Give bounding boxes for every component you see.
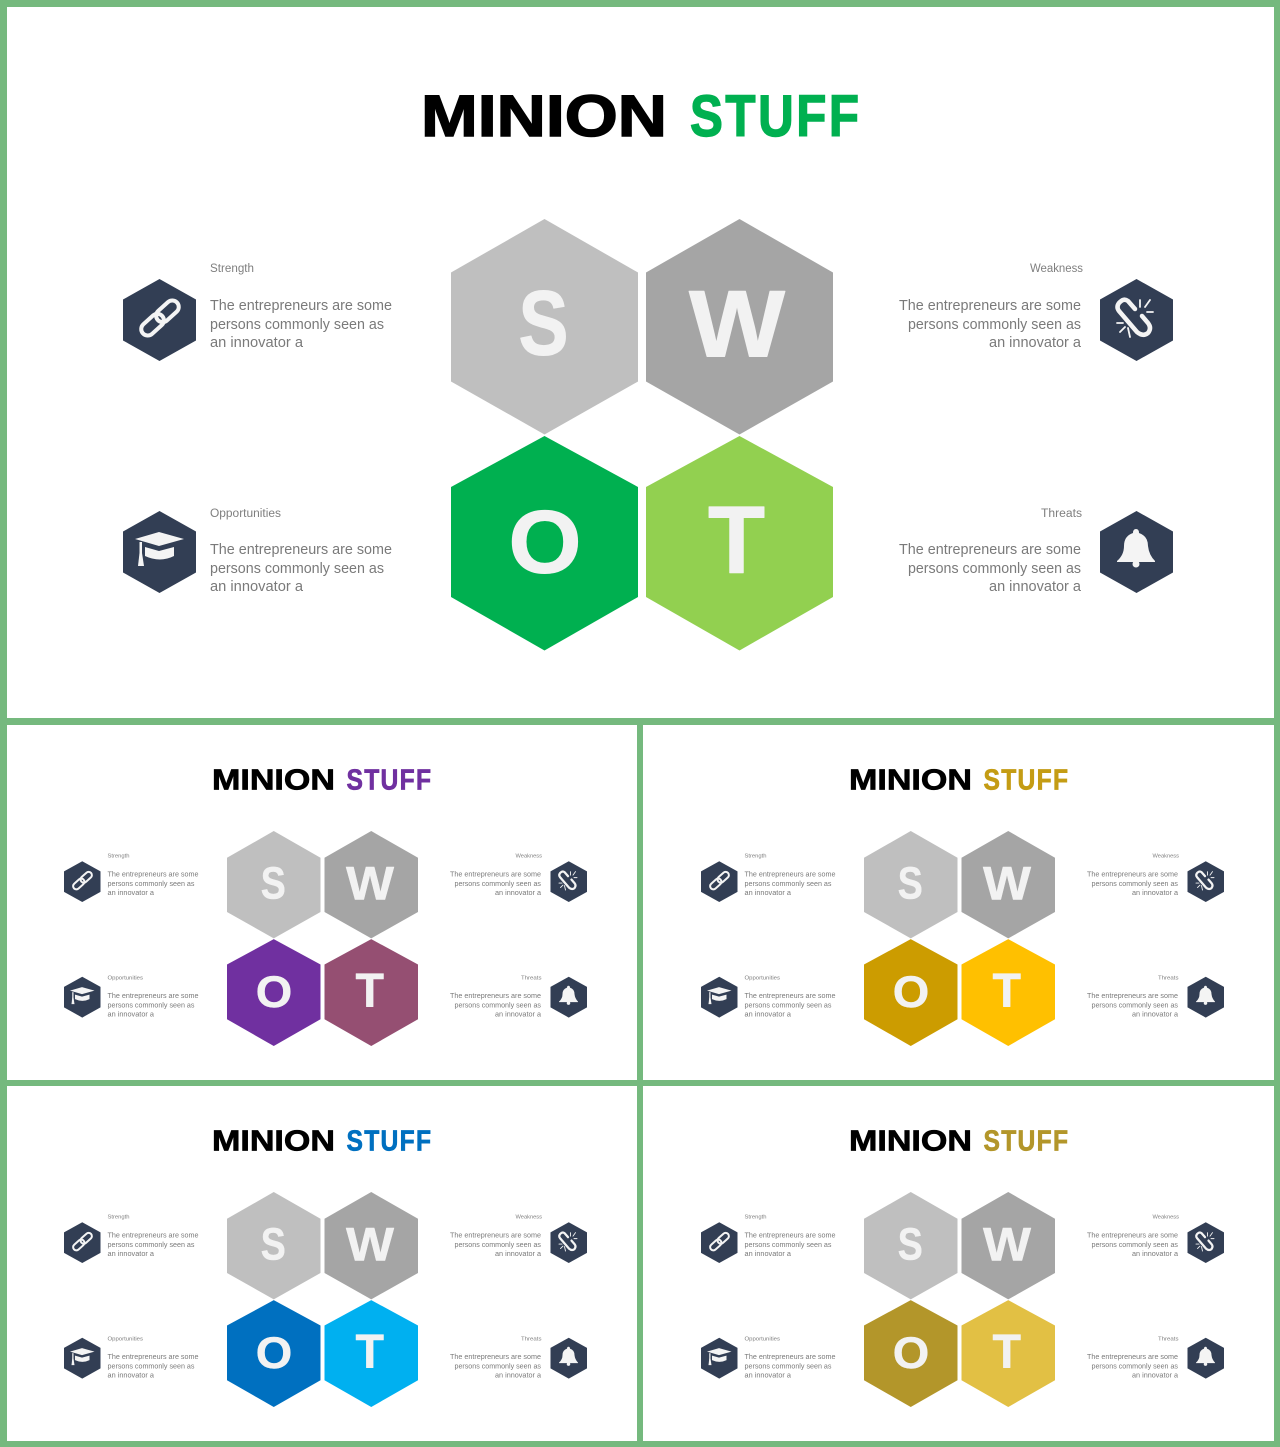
blue weakness item: The entrepreneurs are some xyxy=(450,1231,541,1240)
purple threats item: persons commonly seen as xyxy=(454,1001,541,1010)
purple strength item: an innovator a xyxy=(108,888,155,897)
purple title: STUFF xyxy=(346,764,432,796)
threats item: The entrepreneurs are some xyxy=(899,541,1081,558)
amber weakness item xyxy=(1087,854,1224,902)
panel: amber slide xyxy=(643,725,1274,1080)
gold opportunities item: persons commonly seen as xyxy=(744,1362,832,1371)
blue strength item: The entrepreneurs are some xyxy=(108,1231,199,1240)
opportunities item: Opportunities xyxy=(210,508,281,520)
amber threats item: The entrepreneurs are some xyxy=(1087,991,1178,1000)
purple SWOT hexagons: S xyxy=(261,857,286,909)
title xyxy=(421,84,862,149)
blue title: STUFF xyxy=(346,1125,432,1157)
purple SWOT hexagons xyxy=(227,831,418,1046)
purple weakness item: persons commonly seen as xyxy=(454,879,541,888)
purple threats item xyxy=(450,976,587,1019)
blue opportunities item xyxy=(64,1337,198,1380)
blue SWOT hexagons: S xyxy=(261,1218,286,1270)
amber weakness item: an innovator a xyxy=(1132,888,1179,897)
gold strength item: persons commonly seen as xyxy=(744,1240,832,1249)
amber SWOT hexagons xyxy=(864,831,1055,1046)
title: STUFF xyxy=(690,84,862,149)
gold threats item xyxy=(1087,1337,1224,1380)
strength item: persons commonly seen as xyxy=(210,316,384,333)
panel: gold slide xyxy=(643,1086,1274,1441)
purple strength item: The entrepreneurs are some xyxy=(108,870,199,879)
SWOT hexagons: T xyxy=(708,486,765,594)
blue weakness item: persons commonly seen as xyxy=(454,1240,541,1249)
blue threats item: The entrepreneurs are some xyxy=(450,1352,541,1361)
amber SWOT hexagons: O xyxy=(893,968,929,1017)
purple weakness item: The entrepreneurs are some xyxy=(450,870,541,879)
blue threats item xyxy=(450,1337,587,1380)
gold opportunities item xyxy=(701,1337,836,1380)
panel: purple slide xyxy=(7,725,637,1080)
gold weakness item: persons commonly seen as xyxy=(1092,1240,1178,1249)
amber title: MINION xyxy=(849,765,972,797)
weakness item: persons commonly seen as xyxy=(908,316,1081,333)
weakness item: Weakness xyxy=(1030,263,1083,275)
gold weakness item: Weakness xyxy=(1152,1215,1179,1221)
gold opportunities item: The entrepreneurs are some xyxy=(744,1352,836,1361)
strength item: The entrepreneurs are some xyxy=(210,297,392,314)
blue threats item: an innovator a xyxy=(495,1371,542,1380)
blue opportunities item: Opportunities xyxy=(108,1337,143,1343)
opportunities item: persons commonly seen as xyxy=(210,560,384,577)
amber threats item: Threats xyxy=(1158,976,1179,982)
purple threats item: The entrepreneurs are some xyxy=(450,991,541,1000)
gold strength item: Strength xyxy=(744,1215,766,1221)
blue strength item: an innovator a xyxy=(108,1249,155,1258)
purple weakness item: an innovator a xyxy=(495,888,542,897)
blue SWOT hexagons: O xyxy=(256,1329,292,1378)
purple title: MINION xyxy=(212,765,335,797)
amber title: STUFF xyxy=(984,764,1069,796)
gold SWOT hexagons xyxy=(864,1192,1055,1407)
amber opportunities item xyxy=(701,976,836,1019)
purple SWOT hexagons: W xyxy=(346,858,394,911)
purple SWOT hexagons: O xyxy=(256,968,292,1017)
gold opportunities item: Opportunities xyxy=(744,1337,780,1343)
amber strength item: an innovator a xyxy=(744,888,792,897)
purple threats item: an innovator a xyxy=(495,1010,542,1019)
amber SWOT hexagons: T xyxy=(992,965,1021,1018)
opportunities item: an innovator a xyxy=(210,578,304,595)
blue strength item xyxy=(64,1215,198,1263)
blue SWOT hexagons xyxy=(227,1192,418,1407)
gold SWOT hexagons: S xyxy=(898,1218,923,1270)
purple opportunities item: The entrepreneurs are some xyxy=(108,991,199,1000)
strength item: Strength xyxy=(210,263,254,275)
purple weakness item xyxy=(450,854,587,902)
amber opportunities item: persons commonly seen as xyxy=(744,1001,832,1010)
gold weakness item xyxy=(1087,1215,1224,1263)
amber SWOT hexagons: W xyxy=(983,858,1031,911)
blue strength item: Strength xyxy=(108,1215,129,1221)
blue threats item: persons commonly seen as xyxy=(454,1362,541,1371)
gold title xyxy=(849,1125,1069,1158)
amber strength item: persons commonly seen as xyxy=(744,879,832,888)
gold title: MINION xyxy=(849,1126,972,1158)
weakness item xyxy=(899,263,1173,361)
purple opportunities item xyxy=(64,976,198,1019)
strength item: an innovator a xyxy=(210,334,304,351)
blue SWOT hexagons: T xyxy=(356,1326,384,1379)
amber strength item: The entrepreneurs are some xyxy=(744,870,836,879)
blue threats item: Threats xyxy=(521,1337,542,1343)
gold SWOT hexagons: O xyxy=(893,1329,929,1378)
amber opportunities item: The entrepreneurs are some xyxy=(744,991,836,1000)
weakness item: The entrepreneurs are some xyxy=(899,297,1081,314)
gold threats item: Threats xyxy=(1158,1337,1179,1343)
amber strength item: Strength xyxy=(744,854,766,860)
purple strength item: Strength xyxy=(108,854,129,860)
purple title xyxy=(212,764,432,797)
gold threats item: an innovator a xyxy=(1132,1371,1179,1380)
gold strength item xyxy=(701,1215,836,1263)
weakness item: an innovator a xyxy=(989,334,1082,351)
blue weakness item: an innovator a xyxy=(495,1249,542,1258)
gold threats item: The entrepreneurs are some xyxy=(1087,1352,1178,1361)
amber threats item: an innovator a xyxy=(1132,1010,1179,1019)
threats item: persons commonly seen as xyxy=(908,560,1081,577)
purple threats item: Threats xyxy=(521,976,542,982)
gold strength item: The entrepreneurs are some xyxy=(744,1231,836,1240)
amber opportunities item: an innovator a xyxy=(744,1010,792,1019)
purple strength item xyxy=(64,854,198,902)
purple opportunities item: an innovator a xyxy=(108,1010,155,1019)
blue opportunities item: The entrepreneurs are some xyxy=(108,1352,199,1361)
SWOT hexagons xyxy=(451,219,833,650)
threats item: Threats xyxy=(1041,508,1082,520)
blue title xyxy=(212,1125,432,1158)
amber weakness item: Weakness xyxy=(1152,854,1179,860)
amber strength item xyxy=(701,854,836,902)
gold SWOT hexagons: T xyxy=(992,1326,1021,1379)
blue opportunities item: persons commonly seen as xyxy=(108,1362,195,1371)
amber SWOT hexagons: S xyxy=(898,857,923,909)
threats item: an innovator a xyxy=(989,578,1082,595)
purple SWOT hexagons: T xyxy=(356,965,384,1018)
opportunities item: The entrepreneurs are some xyxy=(210,541,392,558)
SWOT hexagons: W xyxy=(689,272,785,378)
SWOT hexagons: S xyxy=(518,272,568,374)
amber threats item xyxy=(1087,976,1224,1019)
purple weakness item: Weakness xyxy=(516,854,542,860)
gold SWOT hexagons: W xyxy=(983,1219,1031,1272)
threats item xyxy=(899,508,1173,595)
gold opportunities item: an innovator a xyxy=(744,1371,792,1380)
amber opportunities item: Opportunities xyxy=(744,976,780,982)
blue SWOT hexagons: W xyxy=(346,1219,394,1272)
gold weakness item: The entrepreneurs are some xyxy=(1087,1231,1178,1240)
blue title: MINION xyxy=(212,1126,335,1158)
purple opportunities item: Opportunities xyxy=(108,976,143,982)
blue strength item: persons commonly seen as xyxy=(108,1240,195,1249)
amber threats item: persons commonly seen as xyxy=(1092,1001,1178,1010)
purple opportunities item: persons commonly seen as xyxy=(108,1001,195,1010)
panel: green main slide xyxy=(7,7,1274,718)
gold title: STUFF xyxy=(984,1125,1069,1157)
amber title xyxy=(849,764,1069,797)
opportunities item xyxy=(123,508,392,595)
purple strength item: persons commonly seen as xyxy=(108,879,195,888)
gold strength item: an innovator a xyxy=(744,1249,792,1258)
SWOT hexagons: O xyxy=(508,492,582,592)
amber weakness item: persons commonly seen as xyxy=(1092,879,1178,888)
gold threats item: persons commonly seen as xyxy=(1092,1362,1178,1371)
amber weakness item: The entrepreneurs are some xyxy=(1087,870,1178,879)
blue weakness item: Weakness xyxy=(516,1215,542,1221)
gold weakness item: an innovator a xyxy=(1132,1249,1179,1258)
blue opportunities item: an innovator a xyxy=(108,1371,155,1380)
strength item xyxy=(123,263,392,361)
panel: blue slide xyxy=(7,1086,637,1441)
title: MINION xyxy=(421,84,667,149)
blue weakness item xyxy=(450,1215,587,1263)
